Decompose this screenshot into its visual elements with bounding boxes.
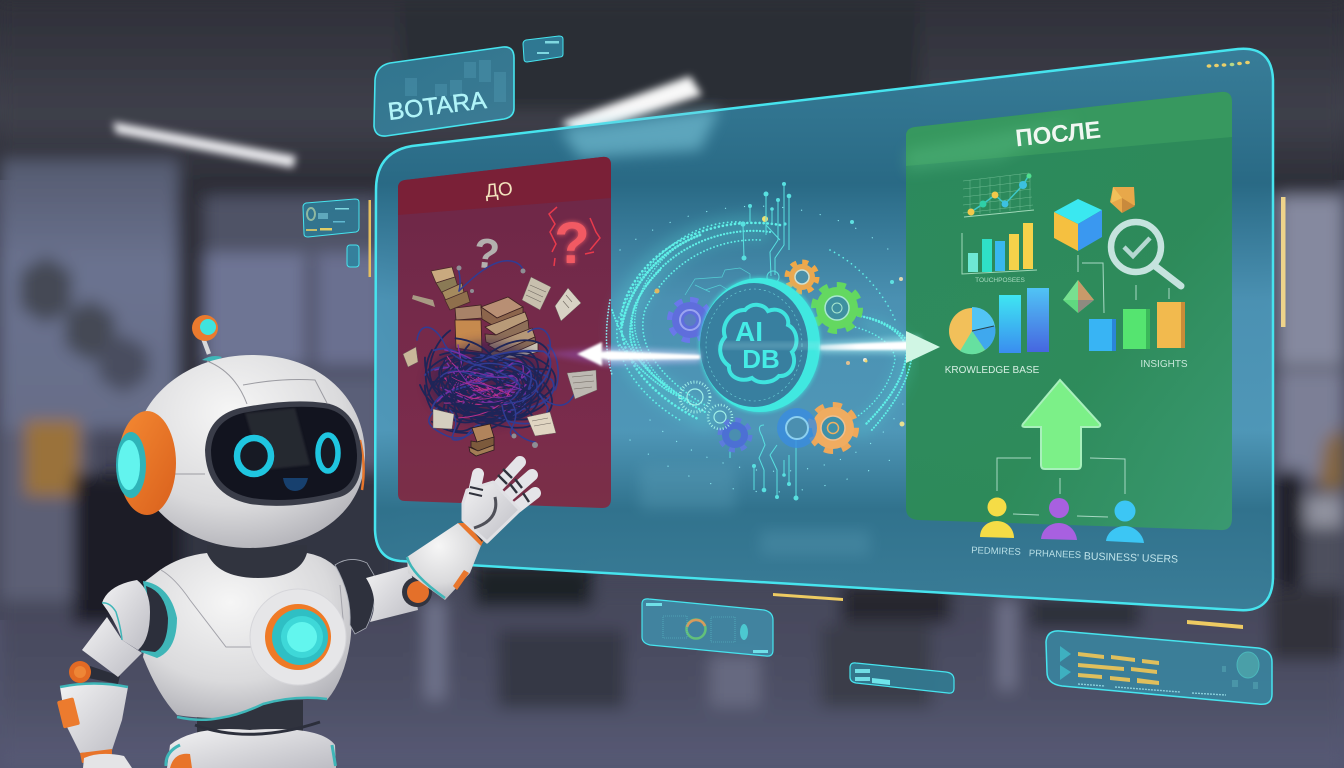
- robot left arm: [57, 580, 150, 768]
- robot left elbow: [88, 666, 120, 684]
- circuit traces bottom: [730, 425, 798, 500]
- AI core disc: [700, 278, 820, 412]
- icon: isometric cube: [1054, 199, 1102, 251]
- icon: grey question mark: ?: [471, 229, 502, 278]
- gear: purple left: [670, 300, 710, 340]
- torso trim: [177, 698, 327, 720]
- icon: green diamond: [1063, 280, 1094, 313]
- chart: 3D colored bars: [1089, 302, 1185, 351]
- robot antenna: [192, 315, 222, 362]
- icon: scattered papers: [403, 277, 597, 436]
- small chart caption: TOUCHPOSEES: [975, 277, 1026, 284]
- chart: large blue bars: [999, 288, 1049, 353]
- accent: right yellow bar: [1281, 197, 1286, 327]
- arrow: beam to before: [540, 342, 700, 366]
- robot lower body: [166, 700, 336, 768]
- center AI DB engine: [606, 182, 912, 500]
- panel: lower dashboard card: [642, 599, 773, 656]
- robot visor: [205, 401, 362, 506]
- icon: book stack central: [455, 297, 538, 362]
- icon: small bottom books: [469, 424, 494, 456]
- panel: lower code card: [1046, 631, 1272, 704]
- panel: after: [906, 92, 1232, 566]
- robot right forearm: [407, 523, 482, 600]
- DB label: DB: [742, 344, 780, 374]
- panel: BOTARA logo: [374, 47, 514, 136]
- icon: book stack small: [431, 267, 470, 310]
- small panel: top right of logo: [523, 36, 563, 62]
- head seams: [175, 361, 327, 474]
- gear: blue bottom: [777, 408, 817, 448]
- main hologram panel: [375, 49, 1273, 610]
- icon: scroll: [412, 295, 435, 307]
- icon: glowing red question mark: ?: [554, 211, 590, 276]
- person: blue: [1106, 500, 1144, 543]
- gear: outline left lower: [680, 382, 710, 412]
- robot left shoulder cap: [102, 580, 150, 650]
- robot neck: [207, 545, 307, 580]
- label: business users: BUSINESS' USERS: [1084, 550, 1178, 566]
- label: insights: INSIGHTS: [1140, 359, 1188, 370]
- gear: orange top: [787, 262, 817, 292]
- robot right wrist: [458, 523, 484, 546]
- small panel: tiny tag: [347, 245, 359, 267]
- gear: orange bottom: [810, 405, 856, 451]
- robot left forearm: [60, 684, 128, 753]
- connector lines: [1078, 255, 1169, 313]
- robot: [57, 315, 535, 768]
- robot ear: [116, 411, 176, 515]
- robot head: [135, 355, 365, 548]
- particle swirl: [606, 206, 912, 492]
- robot right eye: [318, 435, 338, 471]
- robot left upper arm: [82, 617, 142, 677]
- accent: lower yellow bar two: [1187, 620, 1243, 629]
- small panel: left data card: [303, 199, 359, 237]
- panel: before: [398, 157, 611, 508]
- after header band: [906, 92, 1232, 166]
- label: second role: PRHANEES: [1029, 548, 1081, 561]
- before title: ДО: [484, 179, 514, 202]
- robot right ear edge: [360, 440, 364, 490]
- arrow: beam to after: [820, 331, 940, 363]
- icon: growth arrow: [1022, 380, 1100, 469]
- label: first role: PEDMIRES: [971, 545, 1021, 558]
- chart: bar chart small: [962, 223, 1037, 284]
- panel: lower small card: [850, 663, 954, 693]
- person: purple: [1041, 498, 1077, 540]
- after title: ПОСЛЕ: [1014, 117, 1102, 152]
- connector arrows: [997, 458, 1125, 517]
- label: knowledge base: KROWLEDGE BASE: [945, 365, 1040, 376]
- BOTARA title: BOTARA: [386, 87, 489, 126]
- circuit traces top: [685, 182, 791, 295]
- AI label: AI: [735, 316, 763, 347]
- accent: left yellow bar: [368, 200, 371, 277]
- robot mouth: [283, 478, 308, 491]
- gear: indigo bottom: [720, 420, 750, 450]
- chart: line chart: [963, 173, 1034, 217]
- robot hand: [463, 462, 535, 542]
- before header band: [398, 157, 611, 215]
- icon: cable connectors: [456, 266, 538, 448]
- icon: brain outline: [720, 305, 797, 382]
- gear: green: [814, 285, 860, 331]
- robot chest light: [250, 589, 346, 685]
- chart: pie: [949, 307, 995, 354]
- robot left eye: [237, 438, 271, 474]
- robot shoulder ring: [139, 581, 177, 658]
- accent: lower yellow bar one: [773, 593, 843, 601]
- corner dots: [1207, 61, 1250, 68]
- robot torso: [143, 553, 351, 718]
- robot right elbow: [402, 577, 432, 607]
- accent sparkles: [654, 216, 904, 426]
- icon: tangled cables: [410, 261, 575, 453]
- person: yellow: [980, 498, 1014, 538]
- robot right shoulder: [335, 559, 375, 634]
- light beam band: [720, 343, 820, 348]
- gear: outline center lower: [708, 405, 732, 429]
- torso seam: [161, 570, 344, 647]
- icon: glowing red question mark: [549, 207, 600, 276]
- icon: orange gem: [1110, 187, 1135, 213]
- icon: magnifier with check: [1111, 222, 1181, 286]
- robot right upper arm: [366, 566, 418, 622]
